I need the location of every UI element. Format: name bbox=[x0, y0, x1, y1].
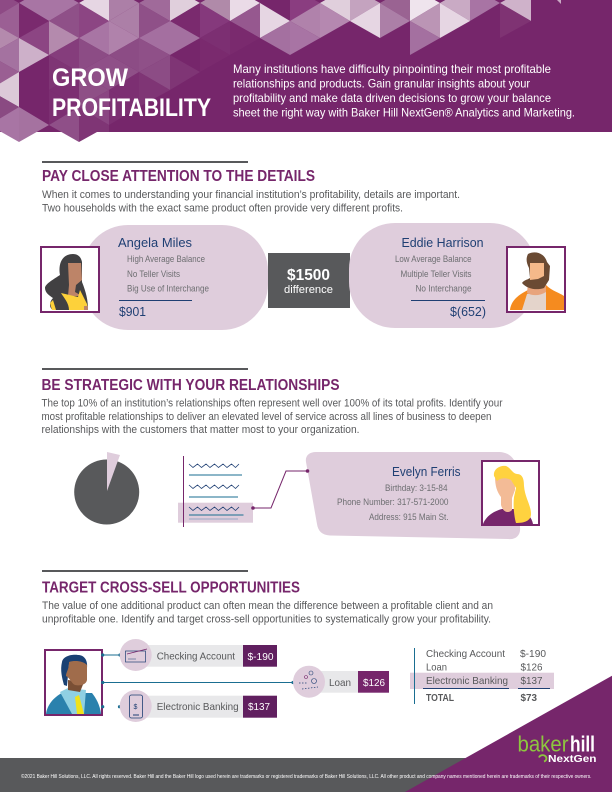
panel: Evelyn Ferris bbox=[306, 452, 539, 539]
details: Phone Number: 317-571-2000 bbox=[337, 497, 448, 508]
summary table: Electronic Banking bbox=[426, 675, 508, 687]
attributes: No Teller Visits bbox=[127, 269, 180, 280]
panel: Angela Miles bbox=[41, 225, 268, 330]
connector lines bbox=[101, 653, 295, 708]
product: electronic banking: $137 bbox=[248, 701, 270, 713]
intro paragraph: profitability and make data driven decisions to grow your balance bbox=[233, 91, 551, 105]
body text: unprofitable one. Identify and target cross-sell opportunities to systematically grow your profitability. bbox=[42, 614, 491, 626]
product: loan: Loan bbox=[329, 677, 351, 689]
product: loan bbox=[293, 666, 389, 698]
section 1: pay close attention bbox=[41, 161, 565, 330]
heading: PAY CLOSE ATTENTION TO THE DETAILS bbox=[42, 168, 315, 185]
amount: $(652) bbox=[450, 304, 486, 319]
summary table bbox=[410, 648, 554, 704]
attributes: High Average Balance bbox=[127, 254, 205, 265]
title: GROW bbox=[52, 64, 128, 92]
section 3: target cross-sell bbox=[42, 570, 554, 722]
logo: baker hill nextgen bbox=[518, 732, 596, 765]
icon: check bbox=[120, 639, 152, 671]
panel: difference bbox=[268, 253, 350, 308]
product: electronic banking: Electronic Banking bbox=[157, 701, 239, 713]
summary table: Loan bbox=[426, 662, 447, 674]
body text bbox=[42, 398, 503, 436]
summary table: $-190 bbox=[520, 648, 546, 660]
intro paragraph bbox=[233, 62, 575, 120]
heading: BE STRATEGIC WITH YOUR RELATIONSHIPS bbox=[42, 377, 340, 394]
copyright text: ©2021 Baker Hill Solutions, LLC. All rights reserved. Baker Hill and the Baker Hill logo used herein are trademarks or registered trademarks of Baker Hill Solutions, LLC. All other product and company names mentioned herein are trademarks of their respective owners. bbox=[21, 773, 592, 780]
body text: When it comes to understanding your financial institution’s profitability, details are important. bbox=[42, 189, 460, 201]
body text: most profitable relationships to deliver an elevated level of service across all lines of business to deepen bbox=[42, 411, 492, 423]
summary table: $73 bbox=[520, 692, 537, 704]
details bbox=[337, 483, 448, 523]
product: checking account: $-190 bbox=[248, 651, 274, 663]
name: Eddie Harrison bbox=[402, 235, 484, 250]
body text: Two households with the exact same product often provide very different profits. bbox=[42, 202, 403, 214]
body text bbox=[42, 189, 460, 214]
summary table: $137 bbox=[520, 675, 543, 687]
icon: swirl bbox=[539, 755, 546, 762]
triangle pattern bbox=[0, 0, 561, 142]
intro paragraph: Many institutions have difficulty pinpointing their most profitable bbox=[233, 62, 551, 76]
intro paragraph: relationships and products. Gain granular insights about your bbox=[233, 76, 530, 90]
header banner bbox=[0, 0, 612, 142]
portrait: customer bbox=[45, 650, 102, 715]
body text: relationships with the customers that matter most to your organization. bbox=[42, 424, 360, 436]
icon: coins bbox=[293, 666, 325, 698]
body text bbox=[42, 600, 493, 626]
icon: mobile phone bbox=[120, 690, 152, 722]
portrait: Angela bbox=[41, 247, 99, 312]
summary table: $126 bbox=[520, 662, 543, 674]
section 2: be strategic bbox=[42, 368, 539, 539]
name: Evelyn Ferris bbox=[392, 464, 461, 479]
pie chart bbox=[74, 452, 139, 524]
summary table: Checking Account bbox=[426, 648, 505, 660]
heading: TARGET CROSS-SELL OPPORTUNITIES bbox=[42, 580, 300, 596]
footer bbox=[0, 676, 612, 792]
attributes: Low Average Balance bbox=[395, 254, 472, 265]
product: checking account bbox=[120, 639, 277, 671]
summary table: TOTAL bbox=[426, 692, 454, 704]
title bbox=[52, 64, 211, 122]
title: PROFITABILITY bbox=[52, 94, 211, 122]
body text: The top 10% of an institution’s relationships often represent well over 100% of its total profits. Identify your bbox=[42, 398, 503, 410]
product: checking account: Checking Account bbox=[157, 650, 235, 662]
attributes bbox=[395, 254, 472, 294]
intro paragraph: sheet the right way with Baker Hill NextGen® Analytics and Marketing. bbox=[233, 106, 575, 120]
logo: baker hill nextgen: baker bbox=[518, 732, 568, 756]
icon: mobile phone: $ bbox=[134, 704, 138, 711]
portrait: Evelyn bbox=[482, 461, 539, 525]
attributes: Big Use of Interchange bbox=[127, 284, 209, 294]
customer list bbox=[178, 456, 253, 527]
body text: The value of one additional product can often mean the difference between a profitable client and an bbox=[42, 600, 493, 612]
logo: baker hill nextgen: hill bbox=[570, 732, 595, 756]
attributes bbox=[127, 254, 209, 294]
details: Birthday: 3-15-84 bbox=[385, 483, 448, 494]
panel: Eddie Harrison bbox=[349, 223, 565, 328]
product: electronic banking bbox=[120, 690, 277, 722]
product: loan: $126 bbox=[363, 677, 385, 689]
amount: $901 bbox=[119, 304, 146, 319]
name: Angela Miles bbox=[118, 235, 192, 250]
attributes: No Interchange bbox=[416, 284, 472, 294]
details: Address: 915 Main St. bbox=[369, 512, 448, 523]
panel: difference: difference bbox=[284, 284, 333, 296]
attributes: Multiple Teller Visits bbox=[400, 269, 472, 280]
panel: difference: $1500 bbox=[287, 267, 330, 284]
portrait: Eddie bbox=[507, 247, 565, 312]
logo: baker hill nextgen: NextGen bbox=[548, 753, 596, 765]
connector bbox=[251, 469, 309, 510]
